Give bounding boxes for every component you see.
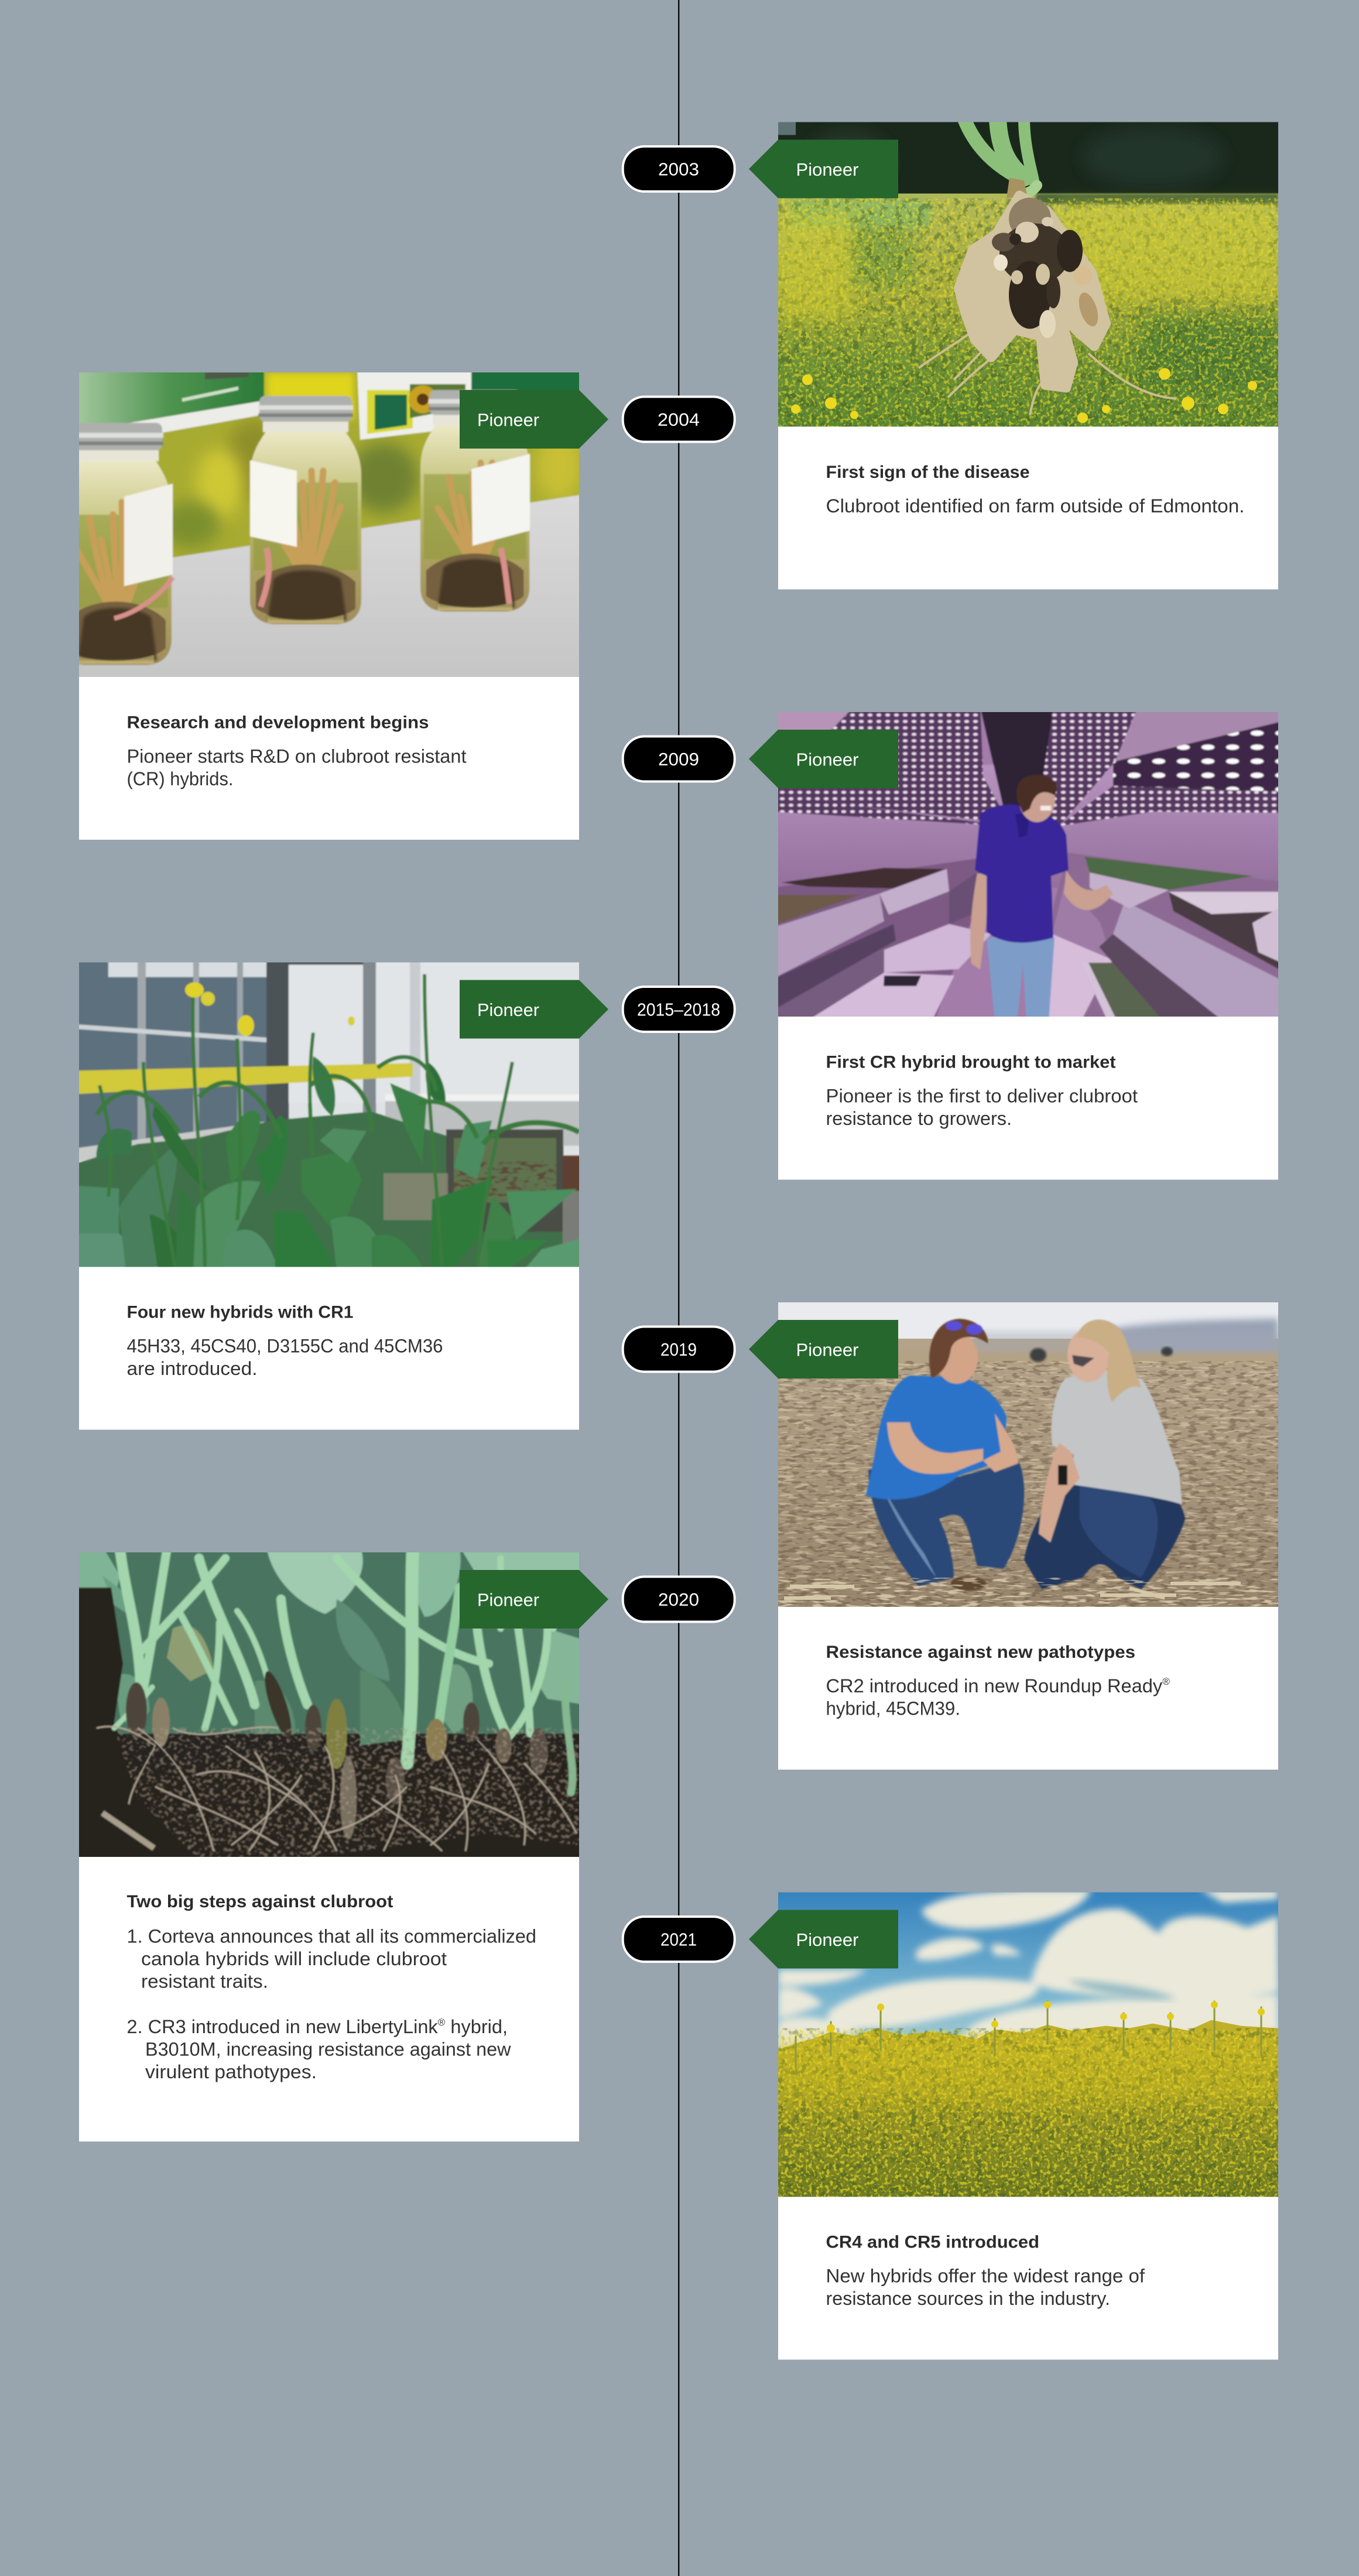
body text: Clubroot identified on farm outside of Edmonton. — [826, 495, 1245, 516]
year pill 2004 — [623, 397, 735, 442]
plant stem — [964, 119, 1037, 193]
panel: 2021 CR4 and CR5 introduced — [778, 1889, 1278, 2360]
canola plant leaves — [73, 1056, 585, 1270]
person — [970, 775, 1113, 1022]
stems — [114, 1549, 573, 1792]
body text — [826, 1675, 1170, 1719]
body list: canola hybrids will include clubroot — [141, 1948, 447, 1969]
photo: clubroot in canola field — [778, 122, 1278, 426]
tag: Pioneer 2004 — [460, 390, 608, 449]
panel: 2009 first CR hybrid brought to market — [772, 706, 1284, 1179]
body text: resistance to growers. — [826, 1108, 1012, 1129]
heading: Research and development begins — [126, 713, 429, 732]
body list: hybrid, — [445, 2016, 508, 2037]
year pill 2015-2018: 2015–2018 — [637, 999, 720, 1020]
panel: 2004 research and development begins — [60, 367, 585, 840]
body list — [126, 1925, 536, 2082]
panel: 2020 two big steps against clubroot — [73, 1547, 585, 2141]
photo: canola roots with galls — [79, 1552, 579, 1857]
body list: 2. CR3 introduced in new LibertyLink — [126, 2016, 433, 2037]
card background — [778, 1302, 1278, 1770]
photo: canola field under cloudy sky — [778, 1893, 1278, 2197]
heading: Resistance against new pathotypes — [826, 1643, 1135, 1662]
person in grey shirt — [1024, 1319, 1185, 1589]
display sign left — [73, 367, 264, 432]
photo: canola plants in greenhouse — [79, 963, 579, 1267]
flowering stems — [97, 974, 579, 1270]
year pill 2015-2018 — [623, 987, 735, 1032]
swollen root gall — [919, 178, 1176, 415]
tag: Pioneer 2009: Pioneer — [796, 750, 858, 769]
body list: 1. Corteva announces that all its commercialized — [126, 1925, 536, 1946]
tag: Pioneer 2020 — [460, 1570, 608, 1629]
year pill 2019: 2019 — [660, 1339, 697, 1360]
body text: 45H33, 45CS40, D3155C and 45CM36 — [126, 1335, 443, 1356]
clouds — [778, 1889, 1278, 2051]
body text — [126, 1335, 443, 1379]
body text: are introduced. — [126, 1358, 258, 1379]
jars — [60, 390, 530, 665]
tag: Pioneer 2015-2018: Pioneer — [477, 1000, 539, 1020]
heading: First CR hybrid brought to market — [826, 1053, 1116, 1072]
body text — [126, 746, 467, 789]
body text: Pioneer is the first to deliver clubroot — [826, 1086, 1138, 1107]
year pill 2009: 2009 — [658, 749, 699, 769]
grow benches right — [1048, 853, 1284, 1022]
body text: resistance sources in the industry. — [826, 2288, 1110, 2309]
photo: clubroot samples in jars — [79, 372, 579, 677]
fibrous roots — [114, 1728, 579, 1857]
person in blue shirt — [866, 1319, 1024, 1590]
body text — [826, 2265, 1145, 2309]
yellow barrier tape — [73, 1063, 413, 1094]
tag: Pioneer 2003 — [749, 139, 898, 198]
leaves — [73, 1547, 585, 1746]
tag: Pioneer 2009 — [749, 730, 898, 788]
body text: CR2 introduced in new Roundup Ready — [826, 1675, 1156, 1696]
year pill 2004: 2004 — [658, 409, 700, 430]
body text — [826, 1086, 1138, 1129]
year pill 2020 — [623, 1576, 735, 1622]
body list: ® — [438, 2017, 446, 2028]
card background — [778, 122, 1278, 589]
grow benches left — [772, 858, 977, 1017]
card background — [79, 963, 579, 1430]
photo: two agronomists in field — [778, 1302, 1278, 1607]
year pill 2009 — [623, 737, 735, 781]
canola crop — [778, 2020, 1278, 2197]
timeline axis — [678, 0, 679, 2576]
tag: Pioneer 2021: Pioneer — [796, 1930, 858, 1950]
panel: 2015-2018 four new hybrids with CR1 — [73, 957, 585, 1430]
body list: virulent pathotypes. — [145, 2061, 317, 2082]
soil left and lower area — [73, 1588, 585, 1863]
body list: B3010M, increasing resistance against new — [145, 2039, 511, 2060]
body text: ® — [1162, 1676, 1170, 1687]
heading: Two big steps against clubroot — [126, 1892, 393, 1911]
tag: Pioneer 2004: Pioneer — [477, 410, 539, 430]
card background — [778, 712, 1278, 1179]
body text: (CR) hybrids. — [126, 768, 233, 789]
ceiling lights — [772, 706, 857, 785]
heading: CR4 and CR5 introduced — [826, 2232, 1039, 2252]
year pill 2003 — [623, 146, 735, 191]
year pill 2021 — [623, 1917, 735, 1962]
panel: 2003 first sign of the disease — [778, 119, 1278, 589]
year pill 2021: 2021 — [660, 1929, 697, 1950]
tag: Pioneer 2019: Pioneer — [796, 1340, 858, 1360]
body text: Pioneer starts R&D on clubroot resistant — [126, 746, 467, 767]
tag: Pioneer 2003: Pioneer — [796, 159, 858, 180]
photo: researcher in growth chamber — [778, 712, 1278, 1017]
heading: Four new hybrids with CR1 — [126, 1302, 354, 1322]
card background — [79, 1552, 579, 2141]
foreground residue — [778, 1578, 1278, 1607]
year pill 2003: 2003 — [658, 159, 699, 179]
panel: 2019 resistance against new pathotypes — [778, 1302, 1278, 1770]
body list: resistant traits. — [141, 1971, 268, 1992]
card background — [79, 372, 579, 840]
tag: Pioneer 2020: Pioneer — [477, 1589, 539, 1610]
body text: hybrid, 45CM39. — [826, 1698, 960, 1719]
tag: Pioneer 2015-2018 — [460, 980, 608, 1039]
table — [73, 494, 585, 683]
body text: New hybrids offer the widest range of — [826, 2265, 1145, 2286]
heading: First sign of the disease — [826, 463, 1029, 482]
display sign right — [357, 367, 585, 440]
year pill 2020: 2020 — [658, 1589, 699, 1610]
tag: Pioneer 2019 — [749, 1320, 898, 1378]
lower background and trays — [73, 1111, 585, 1273]
year pill 2019 — [623, 1327, 735, 1371]
galled root crowns — [126, 1669, 548, 1839]
card background — [778, 1893, 1278, 2360]
tag: Pioneer 2021 — [749, 1910, 898, 1969]
